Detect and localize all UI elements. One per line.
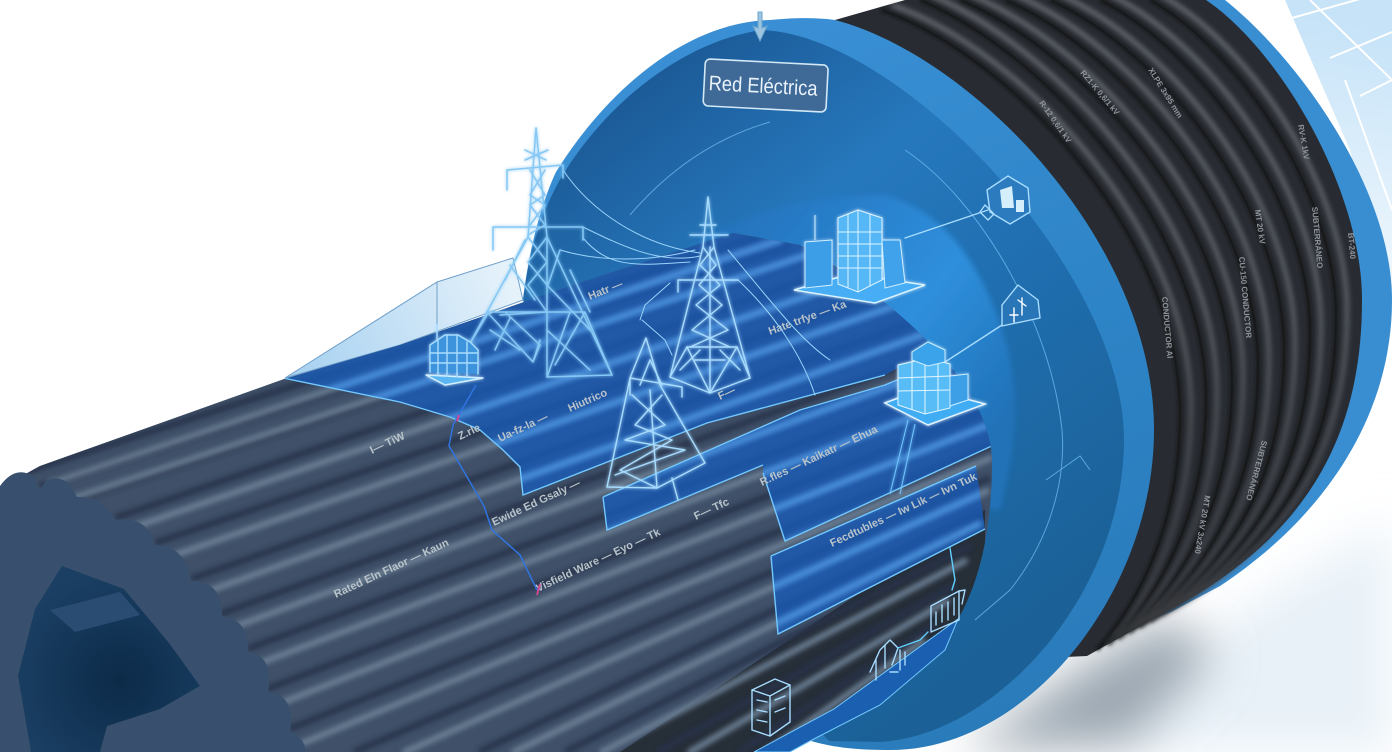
blue hologram panels: [283, 233, 1020, 634]
panel edges: [284, 374, 991, 635]
icon: small building on left: [426, 325, 483, 385]
cable print marks: MT 20 kV 3x240: [1193, 495, 1212, 555]
magenta contact marks: [457, 415, 540, 595]
cable print marks: SUBTERRÁNEO: [1310, 206, 1324, 269]
icon: city on hub: [794, 210, 925, 303]
cable print marks: RV-K 1kV: [1296, 124, 1311, 161]
icon: down arrow: [753, 12, 767, 41]
face arcs: [630, 122, 1090, 620]
cable print text: Visfield Ware — Eyo — Tk: [534, 526, 663, 595]
icon: transmission tower 1: [465, 128, 612, 377]
cable bundle: [26, 233, 992, 752]
cable print text: Ewide Ed Gsaly —: [490, 477, 582, 529]
sail post: [436, 282, 438, 330]
cable print text: Hatr —: [587, 278, 625, 303]
power lines: [560, 170, 830, 395]
blue strip at bundle base: [754, 619, 958, 752]
icon: transmission tower 3: [607, 338, 705, 500]
cable print text: [332, 278, 980, 601]
dark lower cables: [620, 510, 985, 752]
icon: control sign: [931, 548, 965, 632]
pale hologram sail: [285, 258, 523, 378]
icon: hexagon water node: [905, 176, 1030, 238]
cable print text: R.fles — Kaikatr — Ehua: [758, 423, 880, 489]
cable print marks: RZ1-K 0,6/1 kV: [1078, 69, 1122, 117]
icon: office building: [885, 342, 985, 494]
icon: tree node: [945, 285, 1040, 362]
cable print text: Hate trfye — Ka: [767, 298, 849, 338]
black coiled cable: [835, 0, 1362, 660]
cable print marks: XLPE 3x95 mm: [1146, 66, 1184, 120]
glowing grid behind reel: [1285, 0, 1392, 320]
cable print text: Z.rle: [456, 422, 482, 443]
cable print marks: MT 20 kV: [1253, 209, 1267, 245]
label: Red Eléctrica: Red Eléctrica: [708, 72, 818, 101]
blue conductor trace: [449, 385, 537, 590]
cable print text: Hiutrico: [566, 387, 609, 415]
cable print marks: CONDUCTOR Al: [1160, 296, 1174, 359]
cable print text: Rated Eln Flaor — Kaun: [332, 537, 451, 601]
cable print text: Fecdtubles — Iw Lik — Ivn Tuk: [828, 471, 980, 550]
cable print marks: R-12 0,6/1 kV: [1037, 99, 1073, 145]
cable bundle end face: [0, 472, 306, 752]
back flange of reel: [1100, 0, 1392, 640]
cable print text: F— Tfc: [692, 496, 731, 523]
label: Red Eléctrica: [703, 59, 828, 112]
cable print marks: BT-240: [1346, 232, 1357, 260]
front flange of reel: [523, 18, 1154, 750]
cable print text: I— TiW: [368, 430, 407, 457]
face hollow core: [18, 566, 200, 752]
hub recess: [690, 195, 1015, 510]
icon: field workers: [870, 632, 928, 680]
floor shadow: [960, 520, 1392, 752]
icon: transmission tower 2: [670, 197, 750, 393]
cable print marks: [1037, 66, 1357, 555]
cable print text: F—: [716, 384, 737, 403]
cable print text: Ua-fz-la —: [496, 411, 550, 445]
icon: server cabinet: [752, 679, 790, 736]
cable print marks: SUBTERRÁNEO: [1244, 439, 1269, 501]
cable print marks: CU-150 CONDUCTOR: [1237, 256, 1253, 339]
